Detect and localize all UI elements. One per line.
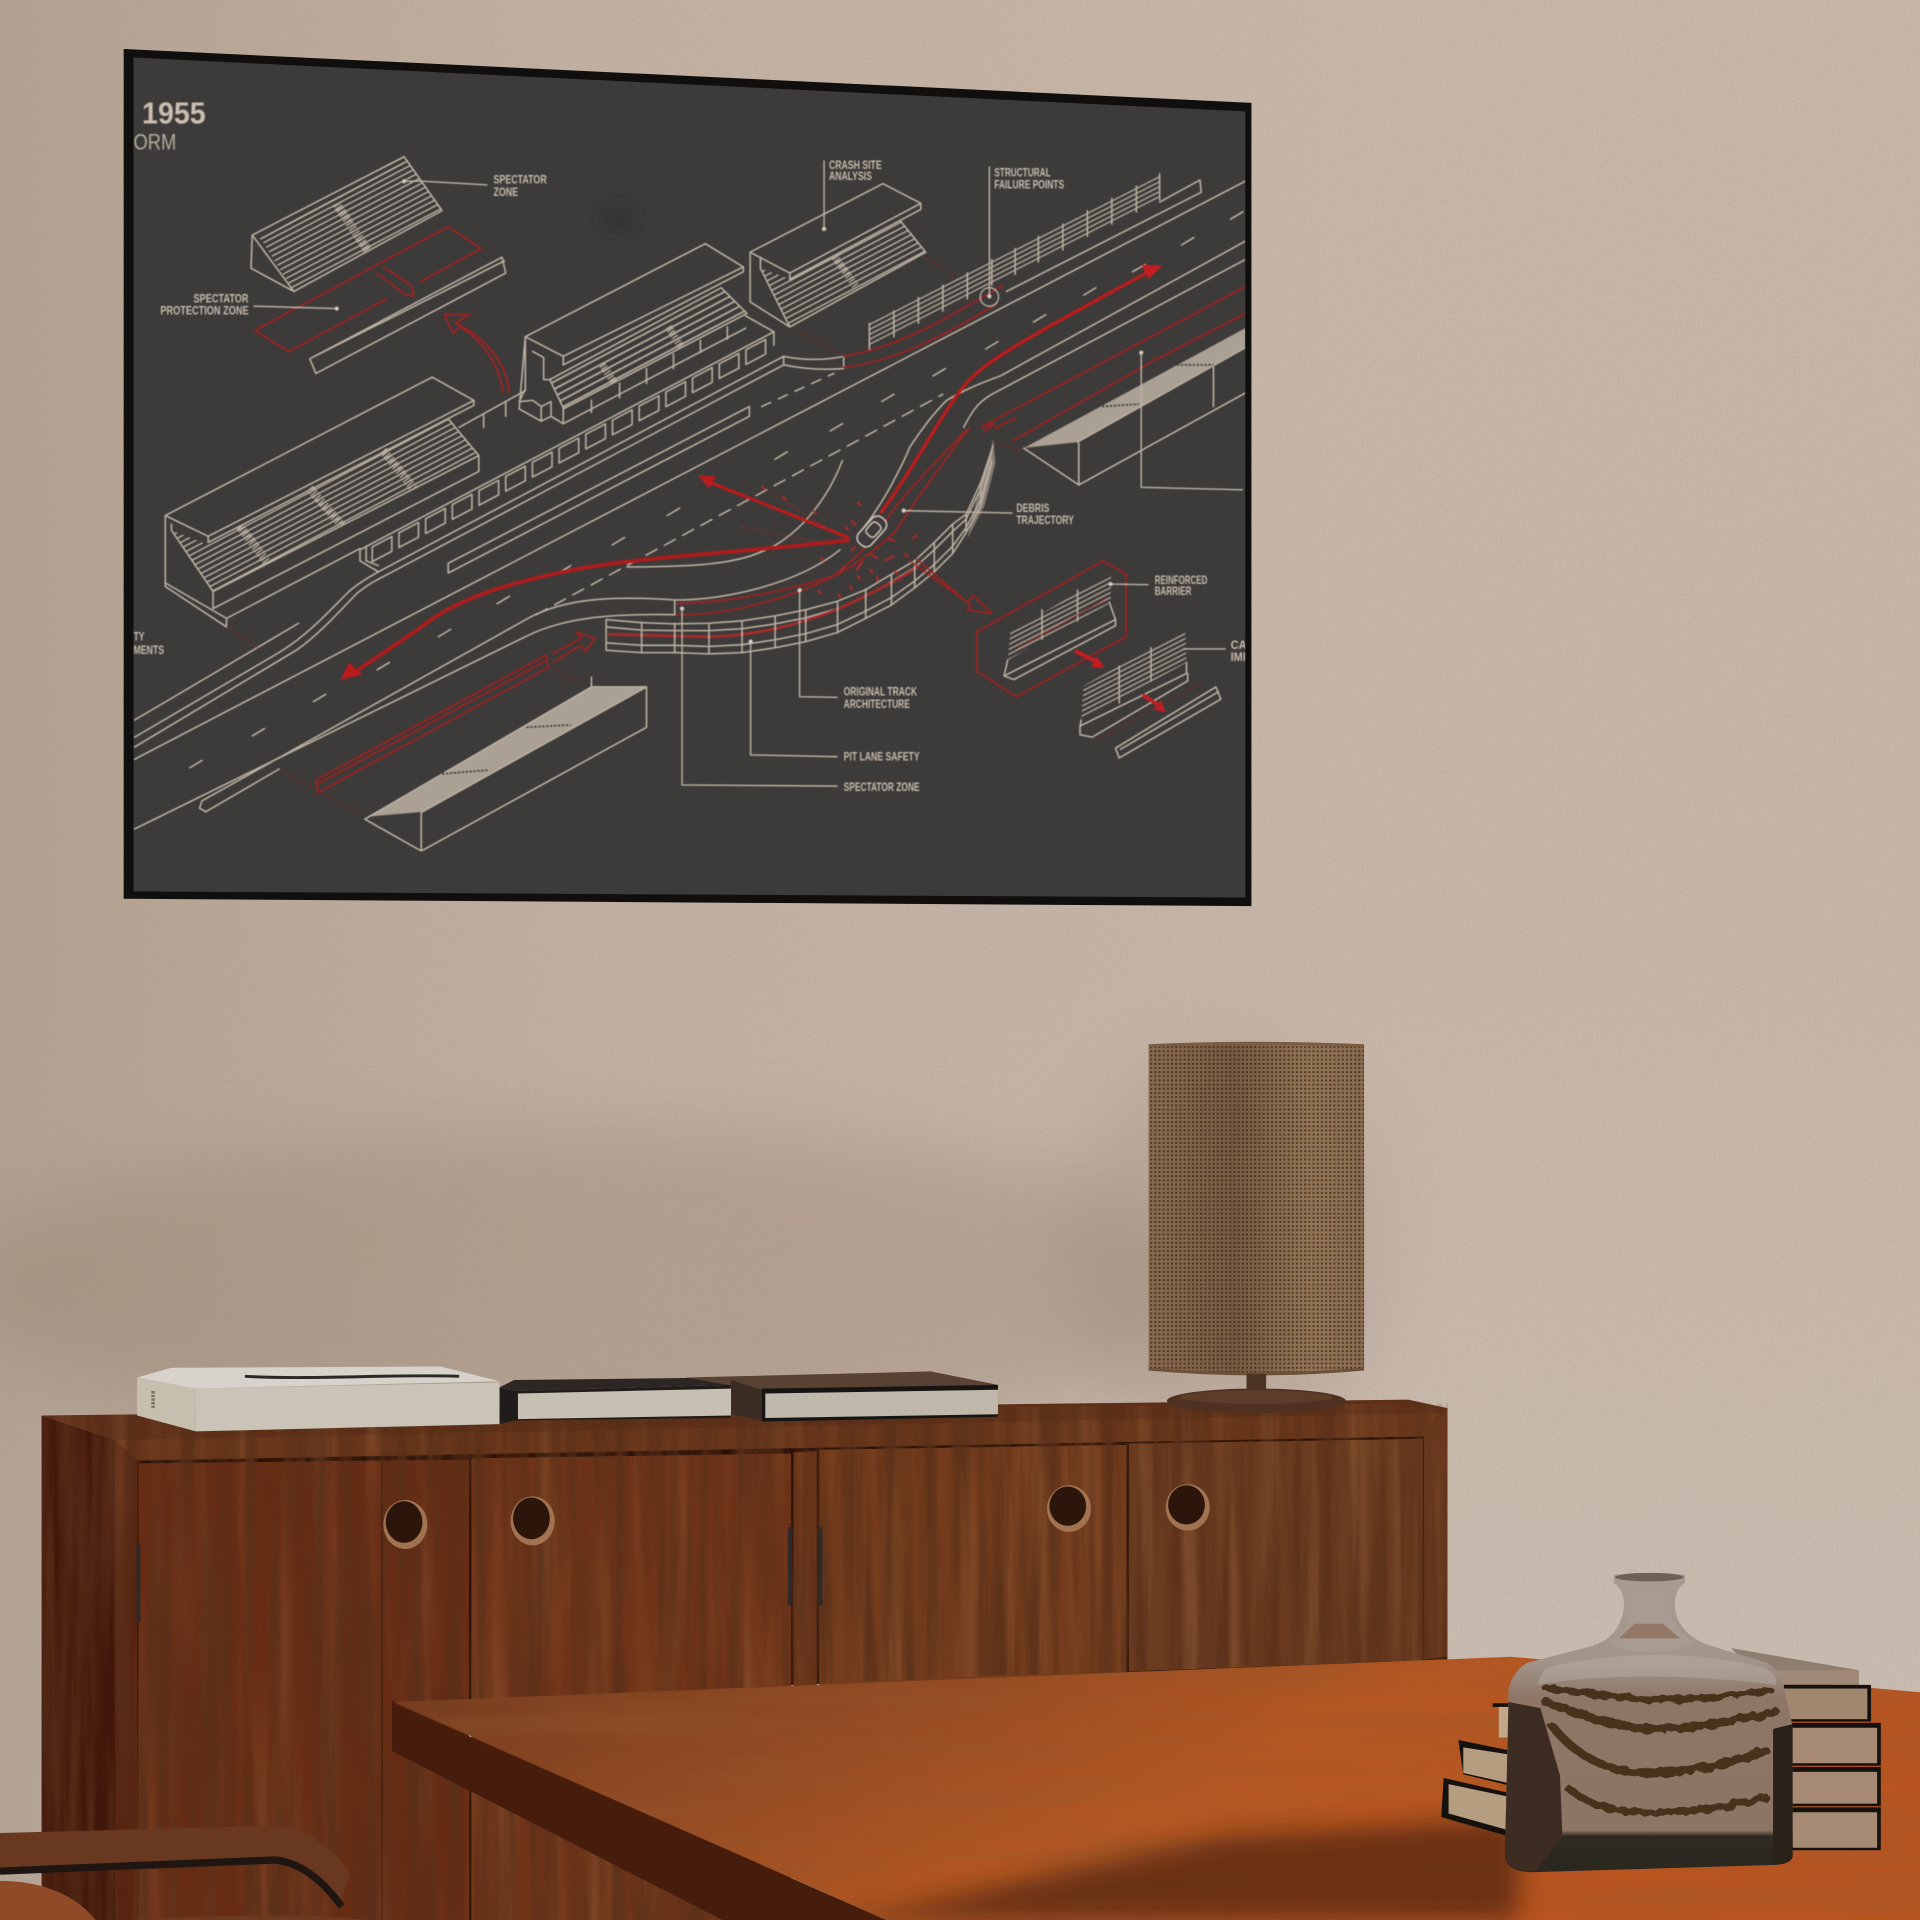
callout: debris trajectory: TRAJECTORY: [1016, 514, 1074, 527]
table lamp: [1149, 1043, 1364, 1413]
callout: spectator zone top: ZONE: [493, 186, 518, 199]
callout: structural failure points: FAILURE POINTS: [994, 179, 1064, 192]
callout: spectator zone top: SPECTATOR: [493, 174, 547, 187]
wood grain: [42, 1403, 1450, 1920]
stand: crash site analysis block: [750, 184, 926, 327]
callout: spectator zone bottom: SPECTATOR ZONE: [844, 781, 920, 794]
barrier detail: reinforced barrier: [977, 561, 1126, 697]
red curved relocation arrow: [444, 315, 509, 393]
door 3: [819, 1445, 1127, 1714]
table shadow: [845, 1818, 1518, 1920]
callout: spectator zone bottom: [680, 606, 920, 794]
callout: pit lane safety: [749, 640, 920, 763]
left books: [1441, 1703, 1520, 1839]
red zone and hollow arrow, lower: [316, 632, 595, 792]
callout: spectator zone top: [402, 174, 547, 199]
callout: safety improvements, cropped: [133, 630, 164, 657]
chair arm: [0, 1826, 350, 1910]
callout: original track architecture: [798, 588, 918, 711]
curved catch fence: [606, 438, 996, 654]
barrier detail: catch fence: [1080, 629, 1201, 740]
framed poster: [124, 49, 1253, 906]
chair back: [0, 1881, 96, 1920]
callout: catch fence impact, cropped: IMP: [1231, 651, 1250, 664]
finger pull holes: [383, 1484, 1210, 1549]
books on cabinet: [137, 1367, 998, 1431]
callout: reinforced barrier: REINFORCED: [1155, 574, 1207, 587]
book 2: [500, 1378, 731, 1424]
callout: catch fence impact, cropped: [1183, 639, 1253, 664]
hollow red arrow to barrier: [910, 558, 992, 613]
title: ORM: [133, 129, 176, 154]
callout: catch fence impact, cropped: CAT: [1231, 639, 1253, 652]
callout: crash site analysis: CRASH SITE: [829, 159, 882, 172]
stand: central grandstand: [459, 244, 774, 427]
poster sheet: [133, 58, 1245, 898]
callouts and leader lines: [133, 159, 1253, 794]
book 3: [686, 1371, 998, 1422]
chair: [0, 1826, 370, 1920]
cabinet front frame: [115, 1440, 137, 1920]
callout: right block leader: [1139, 351, 1243, 490]
red arrow to lower left: [340, 540, 850, 680]
book 1: [137, 1367, 500, 1431]
book stack on table: [1441, 1648, 1881, 1850]
lamp stem: [1247, 1374, 1266, 1393]
red arrow: [1141, 693, 1166, 713]
callout: spectator protection zone: PROTECTION ZONE: [160, 305, 249, 318]
main red trajectory arrows: [340, 264, 1162, 680]
door 1: [138, 1460, 469, 1920]
centre dashes: [190, 212, 1243, 768]
callout: original track architecture: ARCHITECTURE: [844, 698, 910, 711]
centre stile: [793, 1451, 817, 1714]
callout: safety improvements, cropped: TY: [133, 630, 145, 643]
callout: pit lane safety: PIT LANE SAFETY: [844, 750, 920, 763]
callout: safety improvements, cropped: MENTS: [133, 644, 164, 657]
vase dark edges: [1505, 1702, 1562, 1871]
dining table: [392, 1653, 1920, 1920]
door 2: [471, 1453, 791, 1920]
table top: [394, 1657, 1920, 1920]
stand: spectator zone block: [251, 157, 442, 291]
title: 1955: [142, 97, 206, 131]
cabinet top: [42, 1400, 1447, 1461]
callout: debris trajectory: [902, 502, 1074, 527]
dashed inner line: [536, 394, 943, 615]
vase body: [1505, 1573, 1793, 1872]
poster artwork: [133, 97, 1253, 851]
callout: crash site analysis: [822, 159, 882, 231]
chair tube: [0, 1860, 342, 1907]
catch fence, upper right: [868, 174, 1201, 349]
cabinet: [42, 1400, 1450, 1920]
poster frame: [124, 49, 1251, 906]
hinges: [138, 1527, 820, 1622]
red arrow to upper right: [880, 264, 1162, 513]
stand: lower hatched block: [365, 677, 647, 851]
cabinet side panel: [42, 1416, 115, 1920]
right books: [1731, 1648, 1881, 1850]
callout: spectator protection zone: [160, 292, 339, 318]
lamp shade: [1149, 1043, 1364, 1374]
barrier detail: small curb: [1116, 687, 1221, 758]
title: [133, 97, 206, 154]
glass vase: [1505, 1573, 1793, 1872]
door seam: [381, 1460, 383, 1920]
car: [854, 513, 890, 550]
cabinet carcass: [115, 1408, 1447, 1920]
callout: debris trajectory: DEBRIS: [1016, 502, 1050, 515]
stand: right hatched block: [1024, 328, 1245, 485]
table side edge: [392, 1700, 887, 1920]
callout: structural failure points: [980, 166, 1064, 306]
spectator protection zone outline: [255, 227, 481, 351]
track lines: [135, 181, 1245, 829]
callout: reinforced barrier: [1109, 574, 1207, 598]
callout: spectator protection zone: SPECTATOR: [193, 292, 249, 305]
curb: [310, 257, 506, 373]
callout: structural failure points: STRUCTURAL: [994, 166, 1051, 179]
red arrow to upper left: [698, 475, 849, 538]
door 4: [1129, 1439, 1423, 1671]
lamp base: [1167, 1389, 1346, 1413]
callout: crash site analysis: ANALYSIS: [829, 170, 872, 183]
stand: large left grandstand: [165, 377, 479, 627]
pit wall windows: [360, 332, 774, 572]
red track highlights: [227, 257, 1245, 816]
chair seat: [127, 1915, 370, 1920]
debris marks around car: [741, 486, 917, 598]
vase silver top: [1537, 1655, 1776, 1685]
vase liquid stripes: [1545, 1687, 1776, 1812]
callout: reinforced barrier: BARRIER: [1155, 585, 1192, 598]
red arrow: [1074, 649, 1104, 667]
vase neck highlights: [1609, 1589, 1695, 1652]
callout: original track architecture: ORIGINAL TRACK: [844, 686, 918, 699]
